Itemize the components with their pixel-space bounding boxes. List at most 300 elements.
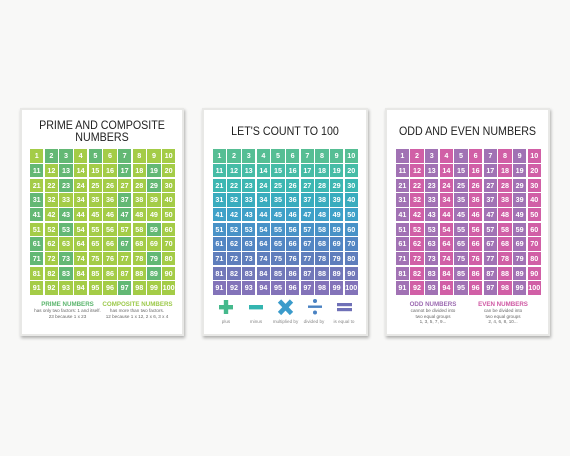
number grid: 41 [33, 210, 41, 219]
number grid: 81 [215, 269, 223, 278]
number grid: 47 [303, 210, 311, 219]
number grid: 48 [501, 210, 509, 219]
number grid: 11 [216, 166, 223, 175]
number grid: 47 [486, 210, 494, 219]
number grid: 11 [399, 166, 406, 175]
number grid: 31 [33, 195, 41, 204]
number grid: 12 [47, 166, 55, 175]
number grid: 80 [165, 254, 173, 263]
number grid: 73 [428, 254, 436, 263]
number grid: 44 [259, 210, 267, 219]
number grid: 98 [318, 283, 326, 292]
number grid: 75 [91, 254, 99, 263]
number grid [30, 149, 175, 295]
number grid: 78 [318, 254, 326, 263]
number grid: 19 [150, 166, 158, 175]
number grid: 35 [274, 195, 282, 204]
number grid: 34 [259, 195, 267, 204]
number grid: 62 [230, 239, 238, 248]
number grid: 71 [398, 254, 406, 263]
number grid: 71 [33, 254, 41, 263]
number grid: 1 [35, 151, 39, 160]
number grid: 79 [150, 254, 158, 263]
number grid: 8 [320, 151, 324, 160]
number grid: 4 [79, 151, 83, 160]
number grid: 21 [398, 181, 406, 190]
number grid: 53 [428, 225, 436, 234]
number grid: 53 [62, 225, 70, 234]
number grid: 89 [333, 269, 341, 278]
number grid: 87 [303, 269, 311, 278]
number grid: 93 [62, 283, 70, 292]
number grid: 3 [247, 151, 251, 160]
number grid: 75 [457, 254, 465, 263]
number grid: 34 [77, 195, 85, 204]
number grid: 42 [47, 210, 55, 219]
number grid: 61 [215, 239, 223, 248]
number grid: 92 [47, 283, 55, 292]
number grid: 48 [135, 210, 143, 219]
number grid: 100 [163, 283, 175, 292]
number grid: 64 [442, 239, 450, 248]
number grid: 39 [333, 195, 341, 204]
number grid: 86 [289, 269, 297, 278]
number grid: 94 [77, 283, 85, 292]
number grid: 32 [47, 195, 55, 204]
number grid: 38 [318, 195, 326, 204]
number grid: 29 [516, 181, 524, 190]
text: odd definition [410, 308, 456, 324]
number grid: 50 [530, 210, 538, 219]
number grid: 76 [106, 254, 114, 263]
number grid: 3 [64, 151, 68, 160]
number grid: 18 [501, 166, 509, 175]
number grid: 18 [318, 166, 326, 175]
number grid: 53 [245, 225, 253, 234]
number grid: 70 [165, 239, 173, 248]
number grid: 52 [47, 225, 55, 234]
number grid: 1 [217, 151, 221, 160]
number grid: 69 [150, 239, 158, 248]
text: prime definition: has only two factors: 1 and itself. [34, 308, 101, 313]
number grid: 25 [457, 181, 465, 190]
label: multiplied by: multiplied by [273, 319, 298, 324]
number grid: 44 [442, 210, 450, 219]
number grid: 31 [398, 195, 406, 204]
number grid: 17 [121, 166, 129, 175]
icon: multiply [280, 301, 292, 314]
number grid: 14 [442, 166, 450, 175]
number grid: 8 [503, 151, 507, 160]
number grid: 57 [486, 225, 494, 234]
number grid: 17 [303, 166, 311, 175]
title [39, 118, 165, 144]
number grid: 35 [457, 195, 465, 204]
number grid: 82 [413, 269, 421, 278]
number grid: 36 [289, 195, 297, 204]
number grid: 89 [150, 269, 158, 278]
number grid: 50 [165, 210, 173, 219]
number grid: 80 [347, 254, 355, 263]
text: even definition: can be divided into [484, 308, 522, 313]
number grid: 16 [289, 166, 297, 175]
number grid: 26 [472, 181, 480, 190]
number grid: 74 [442, 254, 450, 263]
number grid: 85 [457, 269, 465, 278]
number grid: 9 [152, 151, 156, 160]
number grid: 99 [333, 283, 341, 292]
number grid: 2 [232, 151, 236, 160]
number grid: 7 [488, 151, 492, 160]
number grid: 37 [303, 195, 311, 204]
number grid: 100 [345, 283, 357, 292]
number grid: 12 [230, 166, 238, 175]
number grid: 100 [528, 283, 540, 292]
number grid: 56 [289, 225, 297, 234]
number grid: 28 [501, 181, 509, 190]
number grid: 98 [135, 283, 143, 292]
number grid: 81 [398, 269, 406, 278]
number grid: 90 [165, 269, 173, 278]
number grid: 94 [442, 283, 450, 292]
number grid: 22 [413, 181, 421, 190]
number grid: 64 [77, 239, 85, 248]
number grid: 86 [106, 269, 114, 278]
number grid: 5 [459, 151, 463, 160]
poster: odd and even numbers [385, 108, 550, 336]
number grid: 26 [106, 181, 114, 190]
number grid: 9 [518, 151, 522, 160]
number grid: 19 [333, 166, 341, 175]
number grid: 55 [274, 225, 282, 234]
number grid: 52 [413, 225, 421, 234]
number grid: 49 [516, 210, 524, 219]
poster: prime and composite numbers [20, 108, 184, 336]
number grid [213, 149, 358, 295]
number grid: 97 [486, 283, 494, 292]
number grid: 57 [121, 225, 129, 234]
number grid: 20 [530, 166, 538, 175]
number grid: 15 [274, 166, 282, 175]
number grid: 22 [230, 181, 238, 190]
number grid: 78 [135, 254, 143, 263]
number grid: 54 [77, 225, 85, 234]
number grid: 77 [486, 254, 494, 263]
number grid: 79 [516, 254, 524, 263]
number grid: 1 [400, 151, 404, 160]
number grid: 51 [215, 225, 223, 234]
number grid: 67 [303, 239, 311, 248]
number grid: 56 [106, 225, 114, 234]
number grid: 40 [165, 195, 173, 204]
label: minus: minus [250, 319, 262, 324]
number grid: 98 [501, 283, 509, 292]
number grid: 30 [347, 181, 355, 190]
number grid: 30 [165, 181, 173, 190]
number grid: 77 [303, 254, 311, 263]
number grid: 8 [137, 151, 141, 160]
number grid: 43 [62, 210, 70, 219]
number grid: 13 [62, 166, 70, 175]
number grid: 72 [230, 254, 238, 263]
number grid: 23 [62, 181, 70, 190]
number grid: 99 [516, 283, 524, 292]
number grid: 76 [289, 254, 297, 263]
number grid: 66 [472, 239, 480, 248]
number grid: 37 [121, 195, 129, 204]
number grid: 19 [516, 166, 524, 175]
number grid: 96 [289, 283, 297, 292]
number grid: 38 [501, 195, 509, 204]
number grid: 5 [93, 151, 97, 160]
number grid: 54 [259, 225, 267, 234]
number grid: 36 [106, 195, 114, 204]
number grid: 54 [442, 225, 450, 234]
number grid: 11 [33, 166, 40, 175]
number grid: 50 [347, 210, 355, 219]
number grid: 7 [123, 151, 127, 160]
number grid: 58 [501, 225, 509, 234]
number grid: 25 [274, 181, 282, 190]
number grid: 3 [430, 151, 434, 160]
number grid: 91 [33, 283, 41, 292]
number grid: 15 [457, 166, 465, 175]
number grid: 32 [230, 195, 238, 204]
number grid: 27 [486, 181, 494, 190]
number grid: 36 [472, 195, 480, 204]
number grid: 39 [516, 195, 524, 204]
number grid: 4 [261, 151, 265, 160]
number grid: 38 [135, 195, 143, 204]
number grid: 57 [303, 225, 311, 234]
number grid: 93 [245, 283, 253, 292]
number grid: 55 [91, 225, 99, 234]
number grid: 51 [398, 225, 406, 234]
number grid: 87 [121, 269, 129, 278]
number grid: 60 [165, 225, 173, 234]
number grid: 74 [77, 254, 85, 263]
number grid: 46 [106, 210, 114, 219]
number grid: 61 [398, 239, 406, 248]
number grid: 84 [259, 269, 267, 278]
number grid: 62 [47, 239, 55, 248]
title: NUMBERS [75, 130, 129, 144]
number grid: 65 [274, 239, 282, 248]
number grid: 27 [121, 181, 129, 190]
heading: even numbers: EVEN NUMBERS [478, 300, 528, 308]
number grid: 65 [91, 239, 99, 248]
number grid: 46 [472, 210, 480, 219]
number grid: 99 [150, 283, 158, 292]
number grid: 81 [33, 269, 41, 278]
text: even definition [484, 308, 522, 324]
title: ODD AND EVEN NUMBERS [399, 124, 536, 138]
number grid: 80 [530, 254, 538, 263]
icon: divide [308, 299, 322, 314]
label: divided by: divided by [304, 319, 324, 324]
number grid: 87 [486, 269, 494, 278]
number grid: 49 [333, 210, 341, 219]
number grid: 6 [474, 151, 478, 160]
number grid: 23 [428, 181, 436, 190]
number grid: 91 [215, 283, 223, 292]
number grid: 93 [428, 283, 436, 292]
number grid: 88 [318, 269, 326, 278]
number grid: 16 [472, 166, 480, 175]
number grid: 28 [135, 181, 143, 190]
number grid: 13 [428, 166, 436, 175]
number grid: 58 [318, 225, 326, 234]
number grid: 40 [347, 195, 355, 204]
number grid: 76 [472, 254, 480, 263]
number grid: 31 [215, 195, 223, 204]
number grid: 79 [333, 254, 341, 263]
number grid: 97 [121, 283, 129, 292]
number grid: 73 [245, 254, 253, 263]
number grid: 85 [274, 269, 282, 278]
icon: minus [249, 305, 263, 309]
number grid: 10 [165, 151, 173, 160]
number grid: 66 [289, 239, 297, 248]
number grid: 63 [245, 239, 253, 248]
number grid: 22 [47, 181, 55, 190]
poster: let's count to 100 [202, 108, 368, 336]
number grid: 55 [457, 225, 465, 234]
number grid: 32 [413, 195, 421, 204]
number grid: 68 [135, 239, 143, 248]
number grid: 41 [398, 210, 406, 219]
number grid: 90 [530, 269, 538, 278]
text: prime definition: 23 because 1 x 23 [49, 314, 86, 319]
number grid: 34 [442, 195, 450, 204]
number grid: 90 [347, 269, 355, 278]
number grid: 95 [274, 283, 282, 292]
number grid: 5 [276, 151, 280, 160]
number grid: 67 [121, 239, 129, 248]
heading: prime numbers: PRIME NUMBERS [41, 300, 94, 308]
title: PRIME AND COMPOSITE [39, 118, 165, 132]
number grid: 59 [150, 225, 158, 234]
number grid: 12 [413, 166, 421, 175]
label: plus: plus [222, 319, 230, 324]
number grid: 96 [106, 283, 114, 292]
number grid: 73 [62, 254, 70, 263]
number grid: 91 [398, 283, 406, 292]
number grid: 59 [516, 225, 524, 234]
number grid: 30 [530, 181, 538, 190]
number grid: 20 [165, 166, 173, 175]
number grid: 51 [33, 225, 41, 234]
number grid: 13 [245, 166, 253, 175]
number grid: 7 [305, 151, 309, 160]
text: composite definition [106, 308, 168, 319]
number grid [396, 149, 541, 295]
number grid: 10 [530, 151, 538, 160]
number grid: 17 [486, 166, 494, 175]
number grid: 88 [135, 269, 143, 278]
number grid: 68 [318, 239, 326, 248]
number grid: 41 [215, 210, 223, 219]
heading: composite numbers: COMPOSITE NUMBERS [102, 300, 173, 308]
number grid: 14 [77, 166, 85, 175]
number grid: 69 [516, 239, 524, 248]
number grid: 59 [333, 225, 341, 234]
text: prime definition [34, 308, 101, 319]
text: odd definition: 1, 3, 5, 7, 9... [420, 319, 446, 324]
number grid: 85 [91, 269, 99, 278]
number grid: 89 [516, 269, 524, 278]
number grid: 14 [259, 166, 267, 175]
number grid: 83 [428, 269, 436, 278]
number grid: 37 [486, 195, 494, 204]
number grid: 92 [413, 283, 421, 292]
number grid: 29 [333, 181, 341, 190]
number grid: 84 [77, 269, 85, 278]
number grid: 63 [428, 239, 436, 248]
number grid: 49 [150, 210, 158, 219]
number grid: 75 [274, 254, 282, 263]
number grid: 56 [472, 225, 480, 234]
number grid: 45 [457, 210, 465, 219]
number grid: 26 [289, 181, 297, 190]
number grid: 92 [230, 283, 238, 292]
heading: odd numbers: ODD NUMBERS [410, 300, 456, 308]
number grid: 33 [245, 195, 253, 204]
number grid: 47 [121, 210, 129, 219]
number grid: 71 [215, 254, 223, 263]
number grid: 44 [77, 210, 85, 219]
number grid: 65 [457, 239, 465, 248]
title: LET'S COUNT TO 100 [231, 124, 339, 138]
number grid: 43 [245, 210, 253, 219]
number grid: 95 [457, 283, 465, 292]
number grid: 16 [106, 166, 114, 175]
number grid: 67 [486, 239, 494, 248]
text: odd definition: cannot be divided into [411, 308, 455, 313]
text: even definition: 2, 4, 6, 8, 10... [488, 319, 518, 324]
number grid: 43 [428, 210, 436, 219]
number grid: 33 [428, 195, 436, 204]
number grid: 48 [318, 210, 326, 219]
number grid: 2 [49, 151, 53, 160]
number grid: 95 [91, 283, 99, 292]
number grid: 60 [347, 225, 355, 234]
number grid: 77 [121, 254, 129, 263]
number grid: 70 [530, 239, 538, 248]
number grid: 69 [333, 239, 341, 248]
number grid: 97 [303, 283, 311, 292]
number grid: 27 [303, 181, 311, 190]
number grid: 66 [106, 239, 114, 248]
number grid: 33 [62, 195, 70, 204]
number grid: 45 [91, 210, 99, 219]
number grid: 83 [62, 269, 70, 278]
number grid: 68 [501, 239, 509, 248]
number grid: 21 [33, 181, 41, 190]
number grid: 78 [501, 254, 509, 263]
number grid: 2 [415, 151, 419, 160]
number grid: 60 [530, 225, 538, 234]
number grid: 70 [347, 239, 355, 248]
number grid: 96 [472, 283, 480, 292]
number grid: 6 [108, 151, 112, 160]
number grid: 86 [472, 269, 480, 278]
number grid: 58 [135, 225, 143, 234]
number grid: 72 [47, 254, 55, 263]
icons: operation symbols [219, 299, 352, 316]
label: is equal to: is equal to [334, 319, 354, 324]
number grid: 28 [318, 181, 326, 190]
